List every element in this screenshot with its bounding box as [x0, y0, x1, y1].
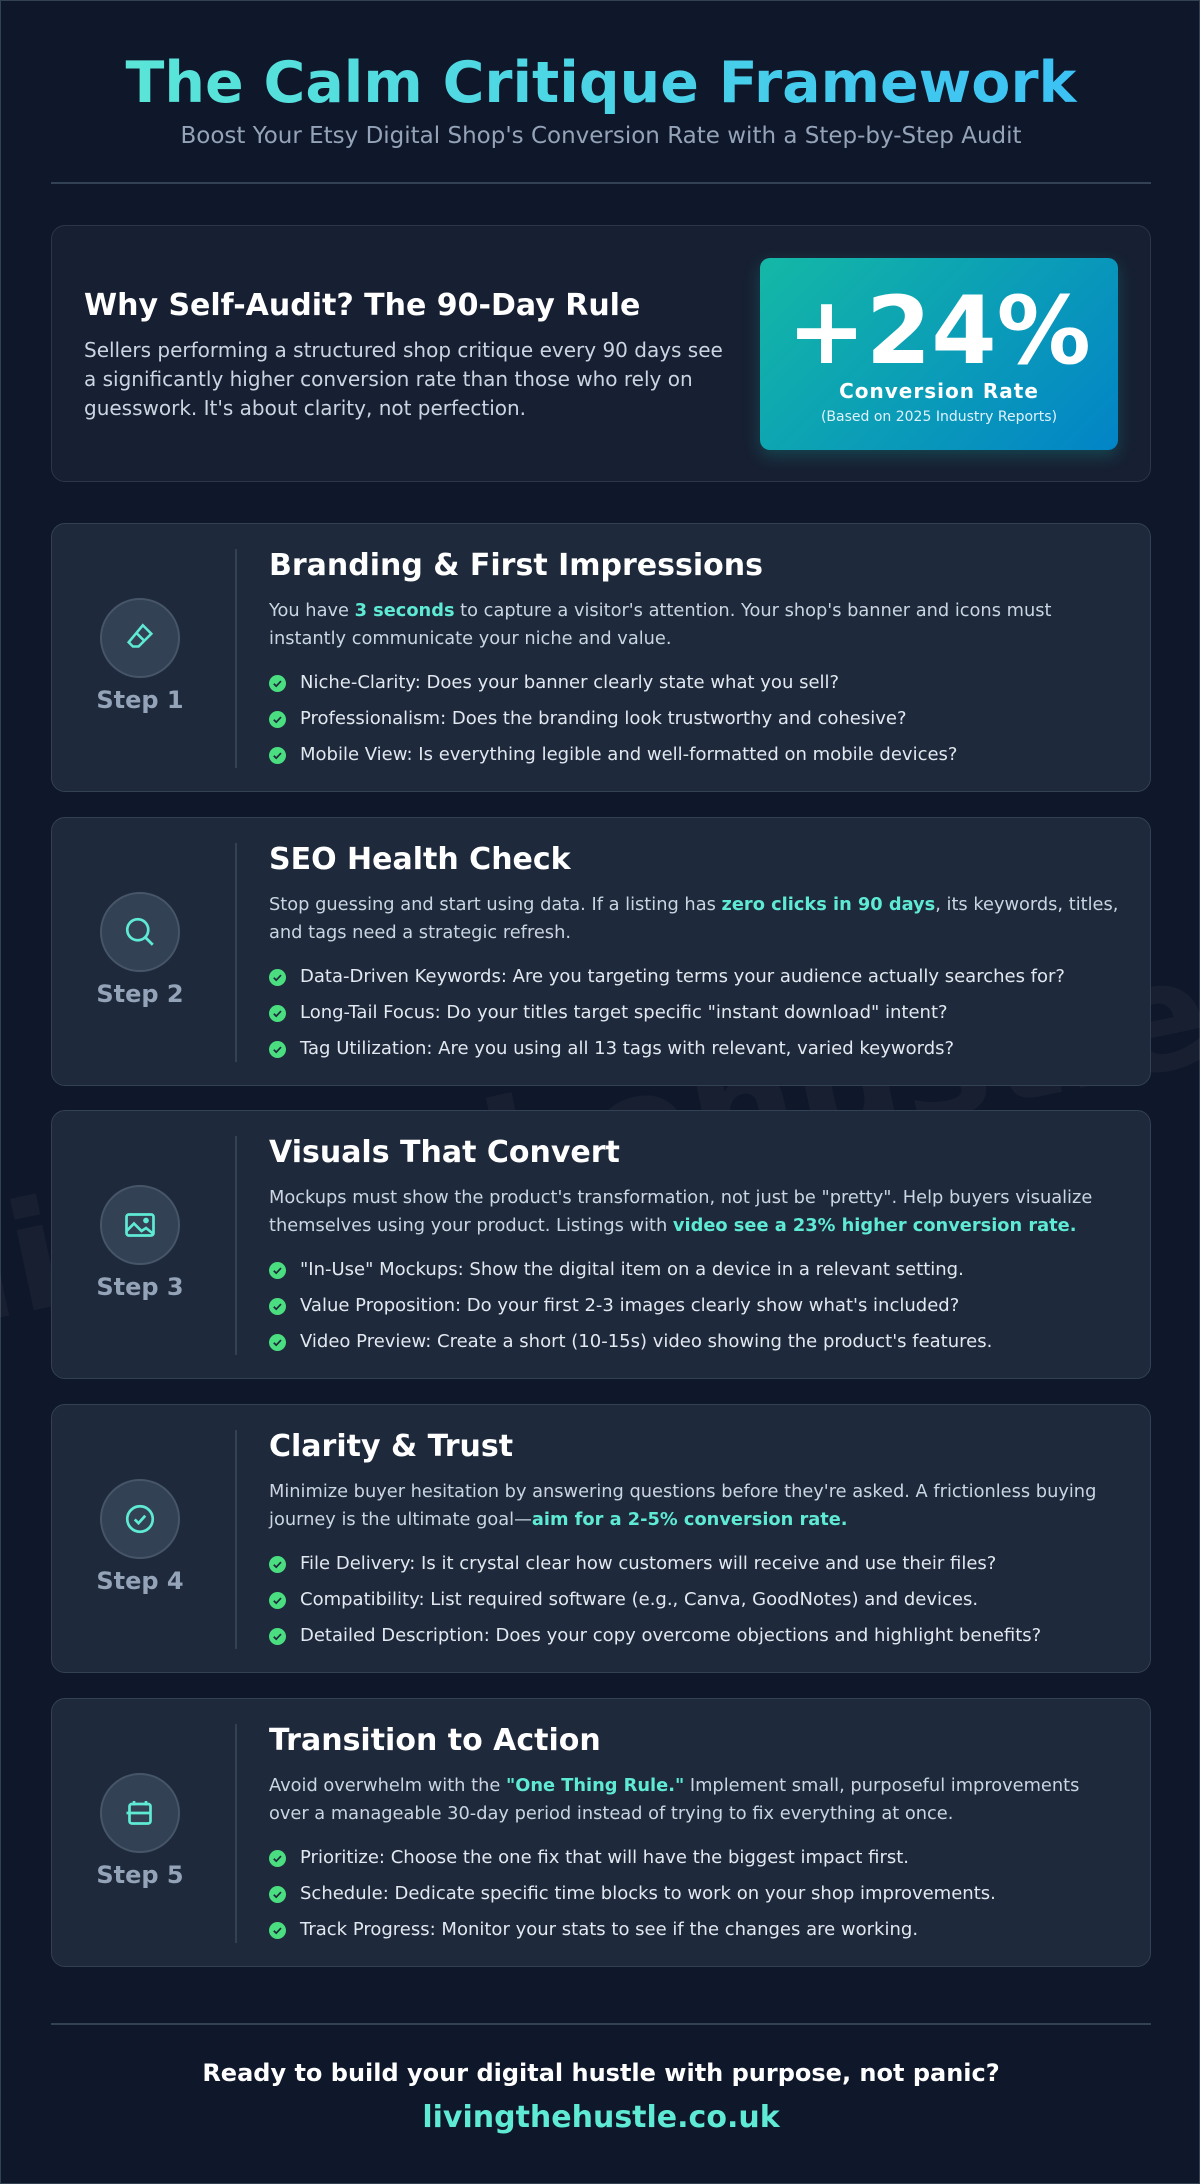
panel: step 5: [51, 1698, 1151, 1967]
panel: step 3: [51, 1110, 1151, 1379]
icon: eraser: [100, 598, 180, 678]
step 1 content: You have 3 seconds to capture a visitor's attention. Your shop's banner and icons must instantly communicate your niche and value.: [269, 600, 1051, 649]
footer url: livingthehustle.co.uk: [422, 2100, 780, 2135]
step 4 content: [268, 1429, 1096, 1646]
step 2 content: Tag Utilization: Are you using all 13 tags with relevant, varied keywords?: [300, 1038, 954, 1059]
step 3 content: "In-Use" Mockups: Show the digital item on a device in a relevant setting.: [300, 1259, 964, 1280]
intro text: Sellers performing a structured shop critique every 90 days see a significantly higher conversion rate than those who rely on guesswork. It's about clarity, not perfection.: [84, 338, 723, 420]
step 5 content: Track Progress: Monitor your stats to see if the changes are working.: [300, 1919, 918, 1940]
panel: intro 90-day rule: [51, 225, 1151, 482]
icon: image: [100, 1185, 180, 1265]
panel: step 1: [51, 523, 1151, 792]
step 3 content: Visuals That Convert: [269, 1135, 620, 1170]
step 5 content: Prioritize: Choose the one fix that will have the biggest impact first.: [300, 1847, 909, 1868]
step 4 content: Compatibility: List required software (e.g., Canva, GoodNotes) and devices.: [300, 1589, 978, 1610]
icon: search: [100, 892, 180, 972]
footer question: Ready to build your digital hustle with purpose, not panic?: [202, 2059, 1000, 2087]
subtitle: Boost Your Etsy Digital Shop's Conversion Rate with a Step-by-Step Audit: [180, 123, 1022, 149]
step 2 content: Long-Tail Focus: Do your titles target specific "instant download" intent?: [300, 1002, 948, 1023]
stat box: (Based on 2025 Industry Reports): [821, 409, 1057, 425]
step 5 content: [269, 1723, 1079, 1940]
step 3 content: [269, 1135, 1092, 1352]
stat box: Conversion Rate: [839, 379, 1039, 403]
step 5 content: Schedule: Dedicate specific time blocks to work on your shop improvements.: [300, 1883, 996, 1904]
step label: Step 1: [96, 686, 184, 714]
step 1 content: Mobile View: Is everything legible and well-formatted on mobile devices?: [300, 744, 957, 765]
panel: step 4: [51, 1404, 1151, 1673]
step 4 content: Detailed Description: Does your copy overcome objections and highlight benefits?: [300, 1625, 1041, 1646]
icon: check circle: [100, 1479, 180, 1559]
icon: calendar: [100, 1773, 180, 1853]
step 4 content: Clarity & Trust: [269, 1429, 513, 1464]
step 2 content: Stop guessing and start using data. If a listing has zero clicks in 90 days, its keywords, titles, and tags need a strategic refresh.: [269, 894, 1118, 943]
step 1 content: [269, 548, 1052, 765]
title: The Calm Critique Framework: [126, 50, 1076, 116]
step 4 content: File Delivery: Is it crystal clear how customers will receive and use their files?: [300, 1553, 996, 1574]
step 2 content: SEO Health Check: [269, 842, 571, 877]
step label: Step 3: [96, 1273, 184, 1301]
step 4 content: Minimize buyer hesitation by answering questions before they're asked. A frictionless buying journey is the ultimate goal—aim for a 2-5% conversion rate.: [269, 1481, 1096, 1530]
stat box: [760, 258, 1118, 450]
step 5 content: Avoid overwhelm with the "One Thing Rule." Implement small, purposeful improvements over a manageable 30-day period instead of trying to fix everything at once.: [269, 1775, 1079, 1824]
panel: step 2: [51, 817, 1151, 1086]
step 1 content: Professionalism: Does the branding look trustworthy and cohesive?: [300, 708, 907, 729]
step 3 content: Value Proposition: Do your first 2-3 images clearly show what's included?: [300, 1295, 959, 1316]
step 2 content: Data-Driven Keywords: Are you targeting terms your audience actually searches for?: [300, 966, 1065, 987]
stat box: +24%: [787, 277, 1091, 386]
step 1 content: Branding & First Impressions: [269, 548, 763, 583]
step label: Step 5: [96, 1861, 184, 1889]
step label: Step 2: [96, 980, 184, 1008]
step 2 content: [269, 842, 1118, 1059]
step 5 content: Transition to Action: [269, 1723, 601, 1758]
title: [1, 45, 1200, 121]
intro heading: Why Self-Audit? The 90-Day Rule: [84, 288, 640, 323]
step 3 content: Mockups must show the product's transformation, not just be "pretty". Help buyers visualize themselves using your product. Listings with video see a 23% higher conversion rate.: [269, 1187, 1092, 1236]
step label: Step 4: [96, 1567, 184, 1595]
step 3 content: Video Preview: Create a short (10-15s) video showing the product's features.: [300, 1331, 992, 1352]
step 1 content: Niche-Clarity: Does your banner clearly state what you sell?: [300, 672, 839, 693]
